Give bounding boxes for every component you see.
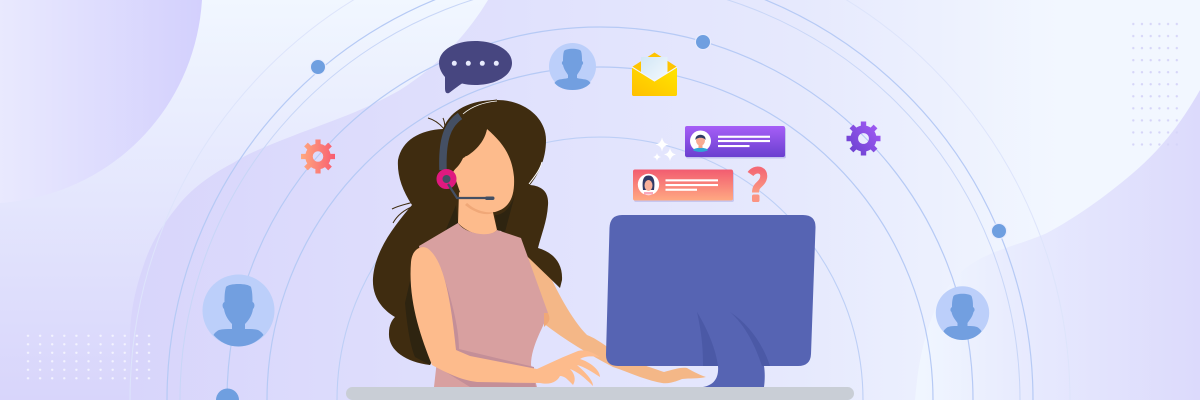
near arm and hand <box>411 247 600 386</box>
card: red message <box>633 170 734 202</box>
corner blob <box>0 0 202 203</box>
icon: question mark <box>750 170 764 202</box>
icon: user avatar right <box>936 286 989 340</box>
hair <box>373 100 562 365</box>
dress <box>419 223 548 387</box>
orbit dots <box>216 34 1007 400</box>
icon: user avatar left <box>202 274 274 346</box>
dot grid: right <box>1129 18 1181 150</box>
stray hairs <box>392 100 497 223</box>
dot grid: left <box>22 332 155 382</box>
desk <box>346 387 854 400</box>
icon: user avatar top <box>549 43 596 90</box>
card: purple message <box>685 126 786 158</box>
agent figure <box>373 100 600 387</box>
neck <box>458 192 497 235</box>
icon: speech bubble <box>439 41 512 93</box>
icon: envelope <box>632 52 677 96</box>
far arm <box>520 238 706 383</box>
avatar: man <box>690 130 711 152</box>
face <box>453 129 514 212</box>
earpiece <box>440 172 454 186</box>
headset band <box>443 116 460 170</box>
monitor <box>606 215 816 387</box>
dress shadow <box>436 268 536 387</box>
microphone <box>448 184 493 198</box>
hair shadow <box>405 187 517 365</box>
orbit arcs <box>130 0 1070 400</box>
icon: purple gear <box>846 122 880 156</box>
icon: sparkles <box>653 138 676 161</box>
avatar: woman <box>638 174 659 195</box>
icon: orange gear <box>301 140 335 174</box>
front hair strand <box>445 120 487 172</box>
